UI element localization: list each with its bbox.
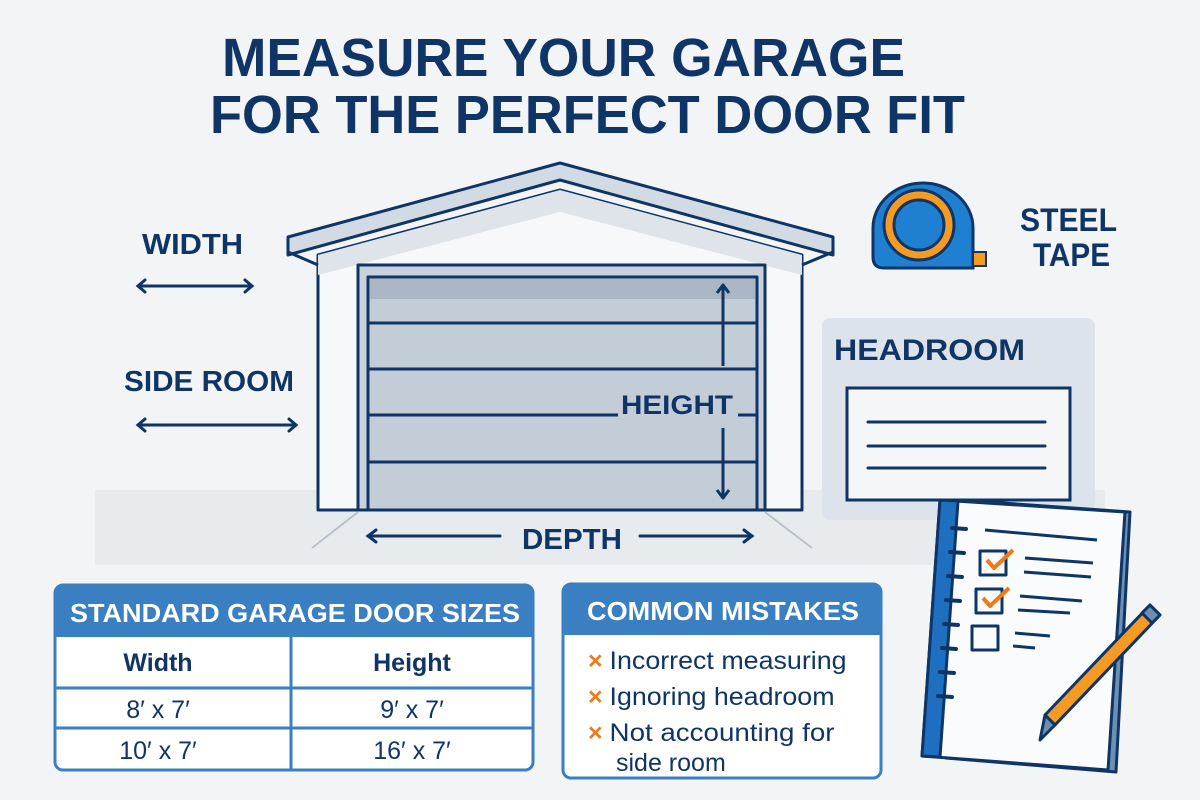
panel: common mistakes: × Incorrect measuring	[588, 647, 847, 675]
panel: common mistakes	[563, 584, 881, 778]
garage illustration	[288, 163, 833, 510]
depth arrow and label	[368, 530, 752, 542]
text: DEPTH	[522, 524, 622, 556]
label: steel tape: TAPE	[1033, 237, 1110, 273]
label: steel tape: STEEL	[1020, 202, 1117, 238]
ground band	[95, 490, 1105, 565]
panel: common mistakes: × Ignoring headroom	[588, 683, 835, 711]
title: FOR THE PERFECT DOOR FIT	[210, 85, 965, 145]
panel: headroom: HEADROOM	[834, 334, 1025, 367]
panel: standard garage door sizes table: Width	[123, 649, 193, 677]
panel: common mistakes: side room	[616, 749, 726, 777]
panel: common mistakes: COMMON MISTAKES	[587, 596, 859, 626]
title: MEASURE YOUR GARAGE	[222, 28, 905, 88]
label: steel tape	[1020, 202, 1117, 273]
icon: checklist notebook with pencil	[922, 500, 1160, 772]
side room label with arrow	[124, 366, 296, 431]
panel: standard garage door sizes table: Height	[373, 649, 452, 677]
width label with arrow: WIDTH	[142, 229, 243, 261]
panel: standard garage door sizes table: 16′ x 7′	[373, 737, 451, 765]
title	[210, 28, 965, 145]
panel: standard garage door sizes table	[55, 585, 533, 770]
panel: standard garage door sizes table: 8′ x 7′	[126, 696, 190, 724]
icon: steel tape	[873, 183, 986, 268]
panel: standard garage door sizes table: 10′ x 7′	[119, 737, 197, 765]
label: height: HEIGHT	[621, 390, 734, 420]
panel: standard garage door sizes table: 9′ x 7′	[380, 696, 444, 724]
panel: headroom	[822, 318, 1095, 520]
panel: common mistakes: × Not accounting for	[588, 719, 835, 747]
side room label with arrow: SIDE ROOM	[124, 366, 294, 398]
width label with arrow	[138, 229, 252, 292]
panel: standard garage door sizes table: STANDARD GARAGE DOOR SIZES	[70, 598, 520, 628]
